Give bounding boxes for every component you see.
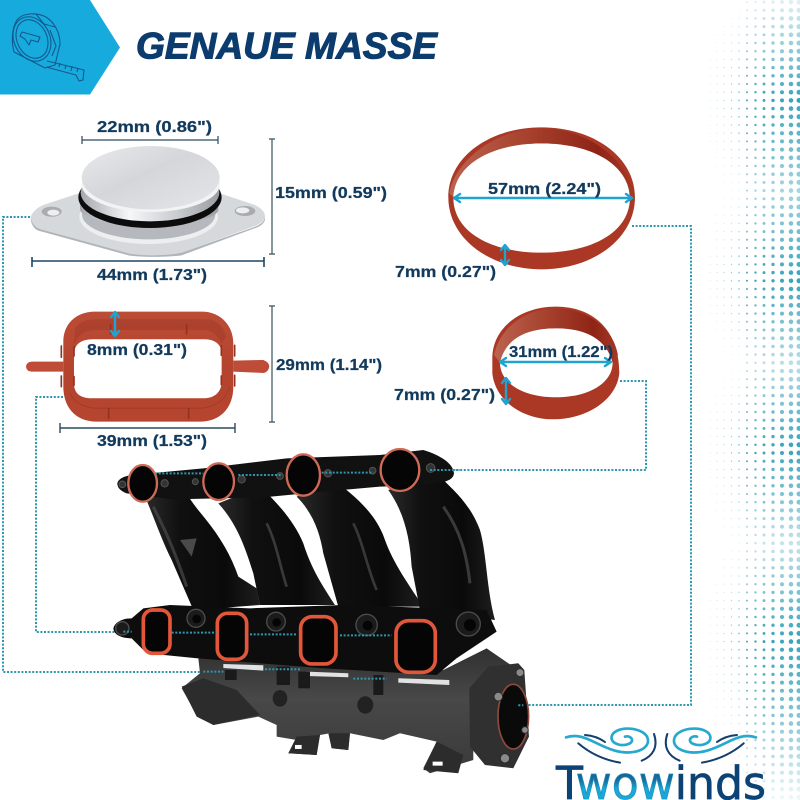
label 39mm: 39mm (1.53") xyxy=(97,433,207,450)
arrow: 8mm xyxy=(111,312,119,336)
manifold lower gaskets xyxy=(143,610,435,672)
arrow: 31mm xyxy=(500,358,611,366)
product: rectangular gasket xyxy=(26,312,269,422)
manifold silver strips xyxy=(223,664,449,685)
manifold lower housing xyxy=(182,648,513,773)
logo: Twowinds xyxy=(555,729,766,800)
dotted leader lines xyxy=(3,217,691,705)
dimension labels xyxy=(87,119,613,450)
logo swirls xyxy=(566,729,756,763)
product: small ring xyxy=(492,307,619,419)
arrow: 7mm small ring xyxy=(502,378,510,404)
label 7mm lower: 7mm (0.27") xyxy=(394,387,495,404)
gasket tabs xyxy=(26,360,269,373)
header badge xyxy=(0,0,120,94)
label 7mm upper: 7mm (0.27") xyxy=(395,264,496,281)
gasket pins xyxy=(61,325,235,418)
manifold upper gaskets xyxy=(128,449,419,502)
manifold bosses xyxy=(116,609,480,636)
label 44mm: 44mm (1.73") xyxy=(97,267,207,284)
manifold brackets xyxy=(288,733,463,773)
plug flange xyxy=(31,192,265,255)
label 8mm: 8mm (0.31") xyxy=(87,342,187,359)
gasket frame xyxy=(63,312,233,422)
product: blanking plug xyxy=(31,146,265,257)
manifold upper flange xyxy=(117,450,454,499)
manifold xyxy=(113,449,529,773)
manifold bolt holes xyxy=(119,464,435,488)
label 15mm: 15mm (0.59") xyxy=(275,185,387,202)
label 57mm: 57mm (2.24") xyxy=(488,181,601,198)
manifold left connector xyxy=(182,678,260,725)
manifold overlay leader dots xyxy=(123,470,523,705)
label 31mm: 31mm (1.22") xyxy=(509,344,613,361)
icon: tape measure xyxy=(6,11,84,81)
cyan arrows xyxy=(111,194,632,404)
arrow: 7mm top ring xyxy=(501,245,509,265)
manifold throttle flange xyxy=(469,663,529,768)
plug body xyxy=(79,189,218,244)
halftone dot pattern xyxy=(710,2,799,800)
manifold lower rail xyxy=(113,605,497,675)
arrow: 57mm xyxy=(454,194,632,202)
label 22mm: 22mm (0.86") xyxy=(97,119,212,136)
manifold clips xyxy=(225,667,383,695)
label 29mm: 29mm (1.14") xyxy=(276,357,382,374)
product: large ring xyxy=(448,127,635,269)
manifold runners xyxy=(145,473,495,620)
dimension lines xyxy=(32,136,275,433)
title: GENAUE MASSE xyxy=(136,26,438,66)
plug cap xyxy=(82,146,220,209)
